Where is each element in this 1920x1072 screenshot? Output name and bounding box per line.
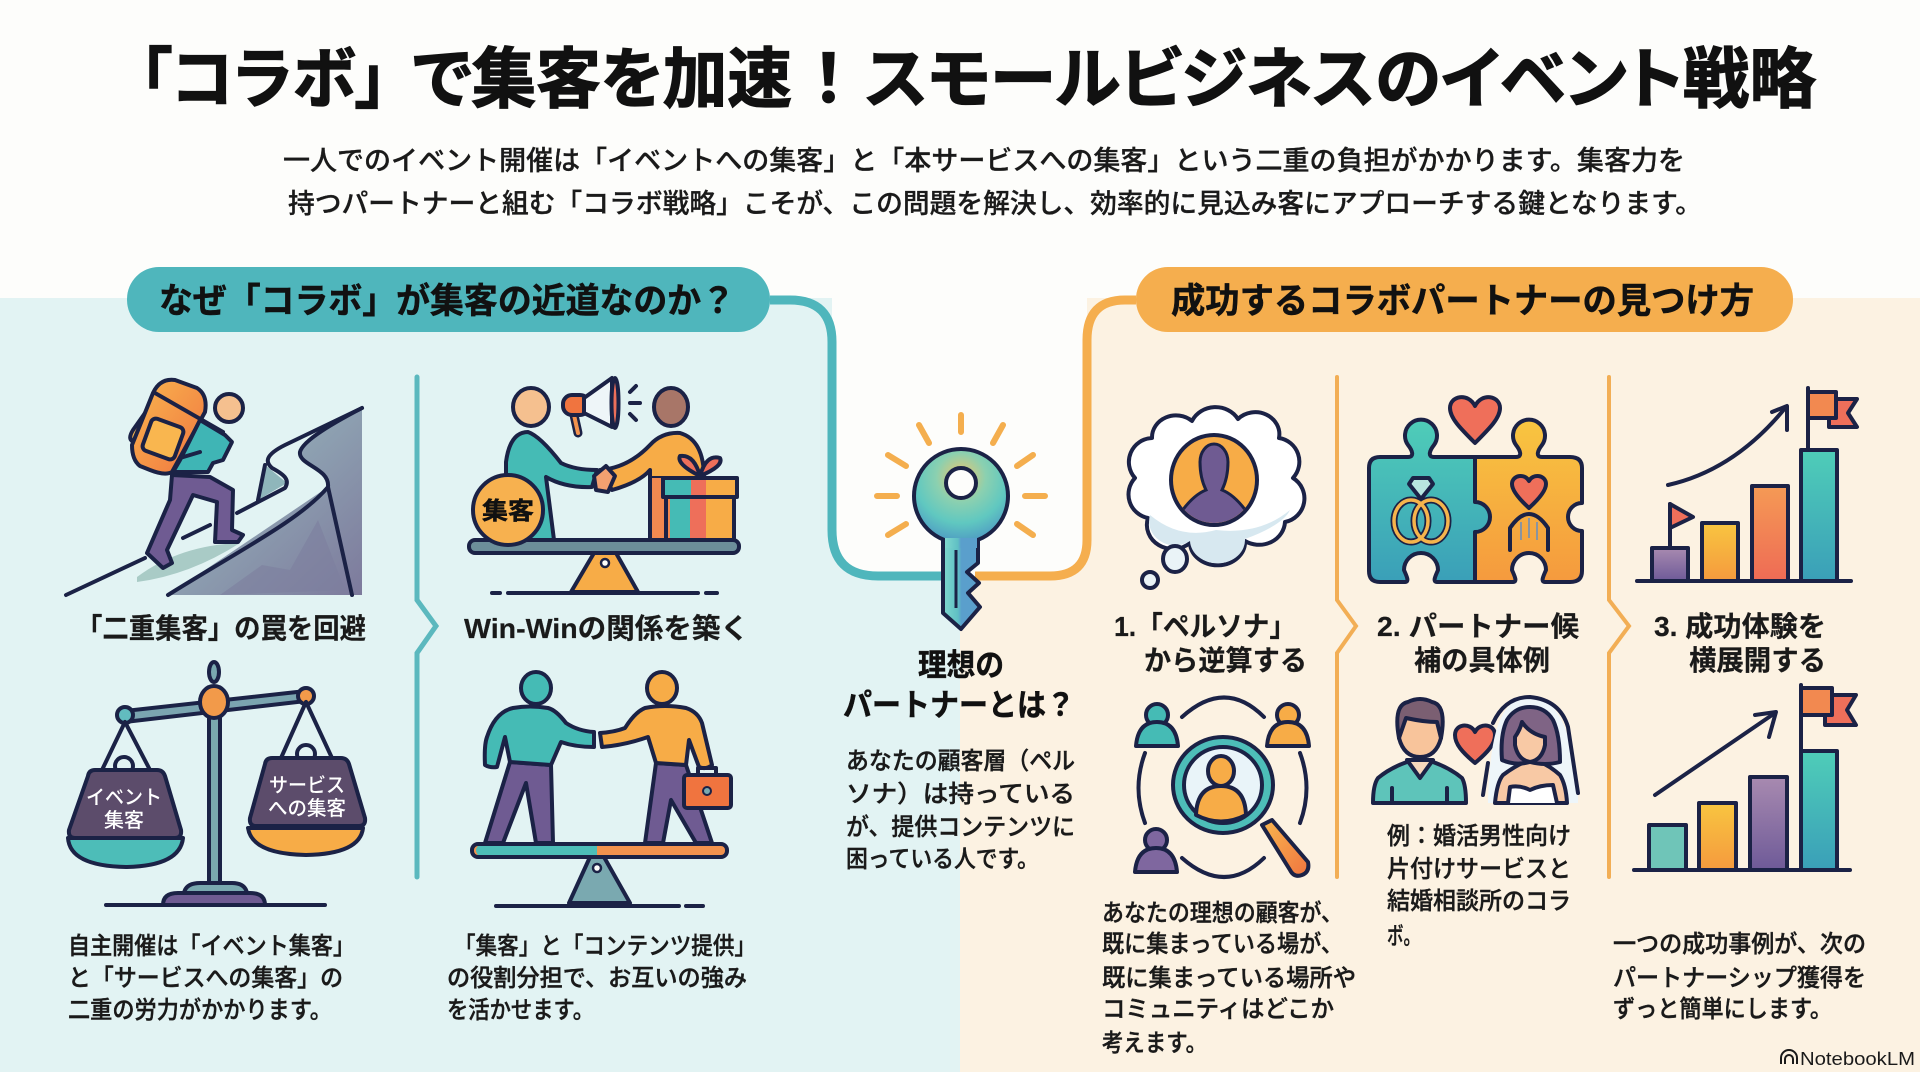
- text: step 2 explanation: [1387, 823, 1571, 950]
- backpack: [132, 380, 206, 474]
- icon: balance scale with two weights: への集客: [268, 797, 346, 820]
- icon: two people shaking hands on balanced seesaw: [472, 672, 731, 906]
- left person: [485, 762, 553, 843]
- label: double trap: 「二重集客」の罠を回避: [76, 613, 366, 644]
- text: step 1 explanation: コミュニティはどこか: [1102, 996, 1334, 1023]
- heading: left section pill: [127, 267, 770, 332]
- arrow: [1668, 407, 1786, 485]
- icon: balance scale with two weights: イベント: [86, 787, 162, 809]
- arcs: [1138, 698, 1306, 877]
- left piece: [1369, 420, 1490, 582]
- text: step 1 explanation: 既に集まっている場が、: [1102, 931, 1343, 958]
- left pan: [102, 722, 150, 770]
- arrow: [1655, 713, 1775, 795]
- label: step 3 heading: 横展開する: [1689, 645, 1826, 676]
- title: ！: [812, 42, 845, 116]
- heading: right section pill: 成功するコラボパートナーの見つけ方: [1171, 282, 1754, 321]
- bars: [1652, 548, 1688, 581]
- legs: [147, 475, 243, 568]
- text: step 1 explanation: 考えます。: [1102, 1030, 1207, 1057]
- right person: [645, 763, 712, 843]
- coin: 集客: 集客: [482, 498, 534, 525]
- left body: [506, 432, 597, 540]
- key shaft: [943, 530, 980, 629]
- text: double effort explanation: 自主開催は「イベント集客」: [68, 933, 355, 960]
- text: role sharing explanation: 「集客」と「コンテンツ提供」: [454, 933, 756, 960]
- text: role sharing explanation: の役割分担で、お互いの強み: [447, 965, 747, 992]
- bride face: [1515, 722, 1545, 762]
- mountain: [168, 408, 362, 595]
- flag: [1799, 685, 1803, 751]
- divider: left panel chevron: [417, 377, 436, 877]
- label: step 3 heading: [1654, 611, 1826, 676]
- heading: right section pill: [1136, 267, 1793, 332]
- label: step 3 heading: 3. 成功体験を: [1654, 611, 1826, 642]
- heading: ideal partner: 理想の: [918, 648, 1004, 683]
- text: step 1 explanation: 既に集まっている場所や: [1102, 965, 1356, 992]
- icon: balance scale with two weights: [68, 662, 365, 905]
- icon: persona thought cloud: [1128, 407, 1304, 588]
- text: role sharing explanation: を活かせます。: [447, 997, 594, 1024]
- veil: [1488, 697, 1578, 803]
- icon: partners shaking hands on seesaw with gift and megaphone: [469, 378, 739, 593]
- text: double effort explanation: と「サービスへの集客」の: [68, 965, 343, 992]
- flag on small bar: [1668, 504, 1672, 548]
- title: スモールビジネスのイベント戦略: [865, 42, 1816, 116]
- panel: right cream background: [960, 298, 1920, 1072]
- text: step 3 explanation: ずっと簡単にします。: [1613, 996, 1832, 1023]
- text: step 3 explanation: 一つの成功事例が、次の: [1613, 931, 1866, 958]
- watermark: NotebookLM: NotebookLM: [1800, 1049, 1915, 1069]
- intro text: 持つパートナーと組む「コラボ戦略」こそが、この問題を解決し、効率的に見込み客にアプローチする鍵となります。: [288, 189, 1702, 219]
- arrow: teal connector to key: [770, 300, 945, 576]
- ground: [492, 591, 717, 595]
- icon: bar chart with flag and curved arrow: [1637, 388, 1857, 581]
- rays: [877, 415, 1045, 535]
- icon: magnifier finding customers: [1135, 698, 1309, 877]
- title: 「コラボ」: [140, 42, 387, 116]
- label: step 2 heading: 2. パートナー候: [1377, 611, 1579, 642]
- icon: bar chart with flag and straight arrow: [1634, 685, 1856, 870]
- intro text: 一人でのイベント開催は「イベントへの集客」と「本サービスへの集客」という二重の負担がかかります。集客力を: [283, 146, 1685, 176]
- text: ideal partner explanation: ソナ）は持っている: [846, 781, 1075, 808]
- fulcrum: [571, 553, 638, 592]
- icon: wedding couple: [1373, 697, 1578, 803]
- text: ideal partner explanation: 困っている人です。: [846, 846, 1039, 873]
- rings: [1394, 500, 1428, 542]
- icon: balance scale with two weights: サービス: [269, 774, 345, 797]
- panel: left teal background: [0, 298, 960, 1072]
- title: で集客を加速: [413, 42, 792, 116]
- baseline: [1637, 579, 1851, 583]
- label: step 2 heading: [1377, 611, 1579, 676]
- text: step 2 explanation: 結婚相談所のコラ: [1387, 888, 1571, 915]
- label: step 1 heading: から逆算する: [1144, 645, 1307, 676]
- icon: hiker climbing mountain: [66, 380, 362, 595]
- icon: puzzle with heart: [1369, 397, 1582, 582]
- heading: left section pill: なぜ「コラボ」が集客の近道なのか？: [159, 282, 735, 321]
- beam: [472, 844, 727, 857]
- torso: [173, 420, 232, 472]
- icon: balance scale with two weights: 集客: [104, 809, 144, 832]
- lens: [1173, 737, 1273, 833]
- text: step 2 explanation: ボ。: [1387, 923, 1420, 950]
- text: step 2 explanation: 片付けサービスと: [1387, 856, 1571, 883]
- groom hair: [1397, 699, 1443, 738]
- ground: [496, 904, 703, 908]
- title: [140, 42, 1816, 116]
- gift box: [666, 495, 734, 540]
- text: ideal partner explanation: [846, 748, 1075, 873]
- key hole: [946, 468, 976, 498]
- handshake: [594, 466, 615, 492]
- handle: [1262, 820, 1308, 876]
- right piece: [1475, 420, 1582, 582]
- stand: [209, 705, 220, 885]
- coin: 集客: [473, 475, 543, 545]
- label: step 1 heading: 1.「ペルソナ」: [1114, 611, 1296, 642]
- label: win-win: Win-Winの関係を築く: [464, 613, 749, 644]
- right body: [600, 433, 704, 540]
- text: double effort explanation: [68, 933, 355, 1024]
- head: [215, 394, 243, 422]
- text: double effort explanation: 二重の労力がかかります。: [68, 997, 332, 1024]
- baseline: [1634, 868, 1850, 872]
- fulcrum: [569, 857, 630, 903]
- text: step 3 explanation: [1613, 931, 1866, 1023]
- icon: glowing key: [877, 415, 1045, 629]
- heading: ideal partner: パートナーとは？: [843, 688, 1075, 723]
- chapel arch: [1510, 514, 1548, 550]
- text: role sharing explanation: [447, 933, 756, 1024]
- text: step 2 explanation: 例：婚活男性向け: [1387, 823, 1571, 850]
- arrow: orange connector to key: [975, 300, 1136, 576]
- text: step 1 explanation: あなたの理想の顧客が、: [1102, 900, 1343, 927]
- seesaw beam: [469, 540, 739, 553]
- heart: [1455, 726, 1495, 763]
- bride shoulders: [1495, 762, 1567, 803]
- thought bubbles: [1163, 546, 1187, 572]
- text: step 1 explanation: [1102, 900, 1356, 1057]
- heads: [513, 388, 549, 426]
- small heart: [1512, 476, 1546, 508]
- flag: [1806, 388, 1810, 450]
- divider: right panel chevron 2: [1609, 377, 1629, 877]
- groom body: [1373, 762, 1466, 803]
- heading: ideal partner: [843, 648, 1075, 723]
- right pan: [281, 702, 332, 758]
- heart: [1450, 397, 1500, 443]
- person inside: [1208, 756, 1234, 786]
- label: step 2 heading: 補の具体例: [1414, 645, 1550, 676]
- groom face: [1399, 706, 1441, 757]
- divider: right panel chevron 1: [1337, 377, 1356, 877]
- briefcase: [684, 775, 731, 808]
- text: ideal partner explanation: が、提供コンテンツに: [846, 814, 1075, 841]
- bars: [1649, 825, 1686, 870]
- text: ideal partner explanation: あなたの顧客層（ペル: [846, 748, 1075, 775]
- intro text: [283, 146, 1702, 219]
- key head: [914, 449, 1008, 543]
- text: step 3 explanation: パートナーシップ獲得を: [1613, 965, 1866, 992]
- bride dress: [1508, 785, 1557, 803]
- bride hair: [1502, 707, 1560, 764]
- label: step 1 heading: [1114, 611, 1307, 676]
- megaphone: [574, 415, 578, 433]
- persons: [1136, 704, 1178, 746]
- beam: [125, 691, 306, 722]
- side pouch: [130, 413, 145, 442]
